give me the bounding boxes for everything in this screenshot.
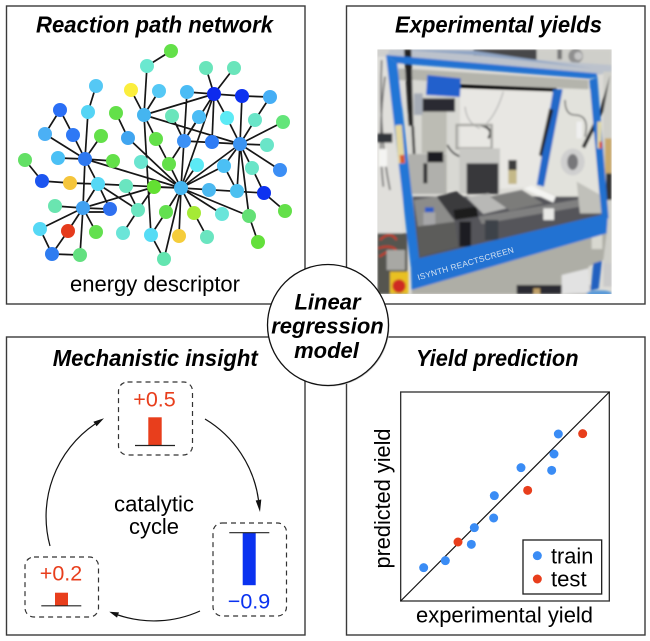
test points — [453, 429, 587, 546]
network edges — [25, 51, 285, 259]
heading: mechanistic insight: Mechanistic insight — [53, 345, 259, 371]
caption: energy descriptor: energy descriptor — [70, 272, 240, 296]
x axis label: experimental yield — [416, 602, 593, 628]
network nodes — [18, 44, 292, 266]
arrow: right card to left card — [109, 611, 200, 621]
arrow: left card to top card — [46, 418, 104, 546]
label: catalytic cycle: cycle — [129, 514, 179, 539]
heading: reaction path network: Reaction path network — [36, 12, 274, 38]
card: step value +0.2 — [25, 557, 98, 617]
card: step value +0.5 — [118, 382, 192, 455]
legend — [523, 540, 602, 594]
center badge: linear regression model: model — [294, 338, 360, 363]
panel: mechanistic insight — [6, 337, 305, 635]
photo: automated reaction screening platform — [377, 49, 612, 296]
legend: test — [551, 567, 587, 592]
panel: experimental yields — [346, 6, 645, 304]
heading: yield prediction: Yield prediction — [416, 345, 578, 371]
label: catalytic cycle: catalytic — [114, 492, 194, 516]
scatter plot — [401, 392, 609, 601]
panel: yield prediction — [346, 337, 645, 635]
arrow: top card to right card — [205, 419, 261, 512]
center badge: linear regression model: Linear — [294, 290, 362, 314]
train points — [419, 429, 563, 572]
label: catalytic cycle — [114, 492, 194, 539]
card: step value +0.5: +0.5 — [133, 388, 176, 412]
center badge: linear regression model: regression — [271, 314, 384, 338]
network graph — [18, 44, 292, 266]
panel: reaction path network — [6, 6, 305, 304]
card: step value -0.9: −0.9 — [228, 589, 270, 613]
heading: experimental yields: Experimental yields — [395, 12, 602, 38]
y axis label: predicted yield — [370, 428, 395, 568]
card: step value -0.9 — [213, 523, 286, 616]
card: step value +0.2: +0.2 — [40, 562, 82, 586]
machine label: ISYNTH REACTSCREEN: ISYNTH REACTSCREEN — [416, 245, 515, 282]
legend: train — [551, 543, 593, 568]
center badge: linear regression model — [268, 264, 390, 386]
